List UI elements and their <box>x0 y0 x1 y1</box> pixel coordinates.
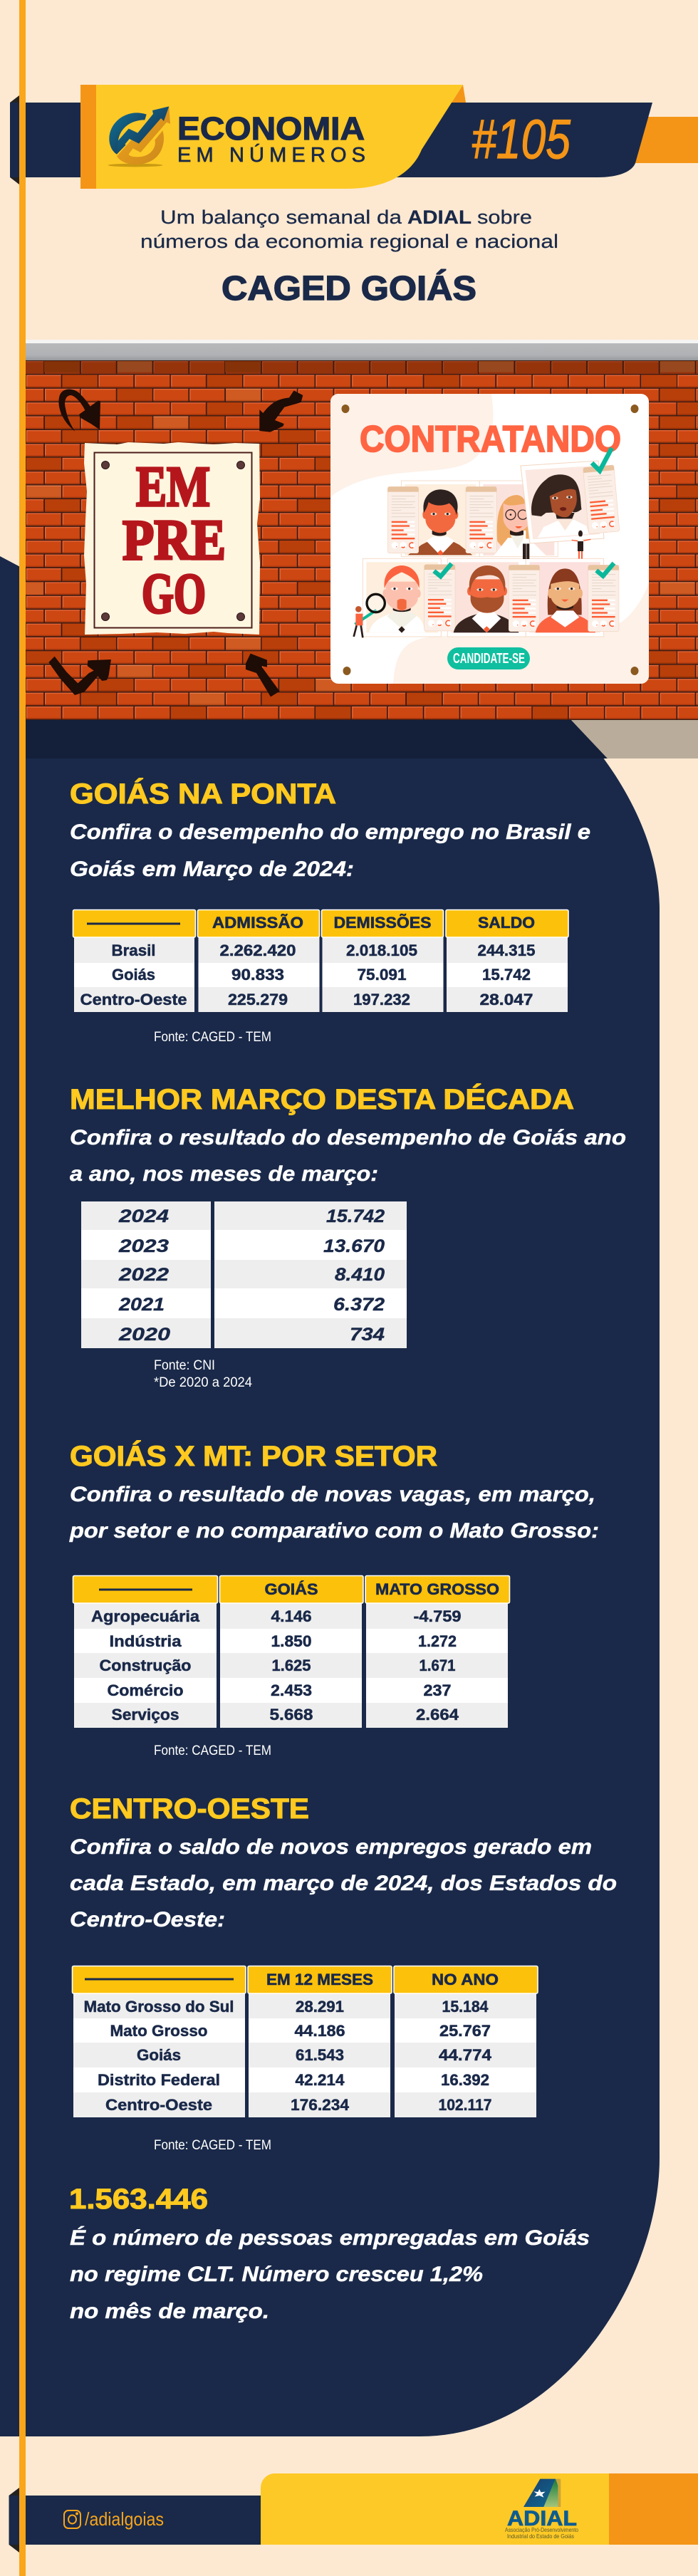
closing text: É o número de pessoas empregadas em Goiás <box>70 2226 590 2250</box>
subtitle: sobre <box>477 207 532 228</box>
table: brasil goiás centro-oeste: 2.018.105 <box>346 942 417 959</box>
table: brasil goiás centro-oeste: 225.279 <box>228 991 288 1008</box>
footer ribbon <box>9 2473 698 2552</box>
poster words <box>123 456 226 625</box>
table: sectors <box>73 1575 510 1728</box>
person 6 <box>536 568 595 632</box>
table: states: Mato Grosso <box>110 2022 208 2040</box>
source note: *De 2020 a 2024 <box>154 1375 252 1390</box>
table: sectors: 1.671 <box>419 1657 456 1674</box>
intro text <box>70 1835 617 1931</box>
table: sectors: Serviços <box>111 1706 179 1724</box>
table: brasil goiás centro-oeste: SALDO <box>478 914 535 932</box>
poster: contratando <box>330 394 649 684</box>
table: states: 15.184 <box>442 1998 489 2016</box>
table: march results by year: 734 <box>350 1325 385 1345</box>
icon: magnifier with figure <box>354 594 385 637</box>
heading: GOIÁS NA PONTA <box>70 778 336 810</box>
table: sectors: 1.850 <box>271 1632 312 1650</box>
person 4 <box>369 565 425 633</box>
subtitle: números da economia regional e nacional <box>140 231 558 252</box>
table: brasil goiás centro-oeste: 28.047 <box>480 991 533 1008</box>
teal check on top photo <box>592 448 612 471</box>
wall base shadow <box>26 720 698 758</box>
table: states: 176.234 <box>291 2096 350 2114</box>
table: states: 102.117 <box>439 2096 491 2114</box>
table: sectors: 2.664 <box>416 1706 459 1724</box>
section: goiás na ponta <box>70 778 590 1045</box>
table: sectors: 237 <box>423 1681 452 1699</box>
subtitle: Um balanço semanal da <box>160 207 402 228</box>
icon: brush arrow top left <box>58 389 100 432</box>
logo wordmark: EM NÚMEROS <box>177 143 365 167</box>
source note: Fonte: CAGED - TEM <box>154 2138 271 2153</box>
intro text <box>70 1126 626 1186</box>
closing text: no mês de março. <box>70 2300 269 2323</box>
poster words: PRE <box>123 509 226 572</box>
closing text <box>70 2226 590 2323</box>
section: goiás x mt <box>69 1440 599 1758</box>
table: sectors: Indústria <box>110 1632 182 1650</box>
table: sectors: GOIÁS <box>265 1580 318 1598</box>
intro text: Confira o resultado de novas vagas, em março, <box>70 1483 595 1506</box>
illustration: brick wall <box>26 340 698 720</box>
table: march results by year: 6.372 <box>333 1295 385 1315</box>
source note <box>154 1358 252 1390</box>
table: brasil goiás centro-oeste: 2.262.420 <box>219 942 296 959</box>
source note: Fonte: CAGED - TEM <box>154 1030 271 1045</box>
banner: header ribbon <box>10 85 698 189</box>
table: states <box>73 1966 538 2117</box>
edition number: #105 <box>472 108 571 170</box>
icon: economia logo <box>108 106 170 167</box>
table: states: Centro-Oeste <box>105 2096 212 2114</box>
table: march results by year: 15.742 <box>326 1206 385 1226</box>
table: sectors: Agropecuária <box>91 1607 200 1625</box>
nails <box>101 462 245 621</box>
intro text <box>69 1483 599 1543</box>
table: brasil goiás centro-oeste: ADMISSÃO <box>212 914 303 932</box>
table: march results by year: 2021 <box>118 1295 165 1315</box>
table: sectors: Comércio <box>107 1681 184 1699</box>
logo: adial: Associação Pró-Desenvolvimento <box>505 2526 578 2533</box>
table: states: Mato Grosso do Sul <box>84 1998 234 2016</box>
vertical orange bar <box>19 0 26 2576</box>
closing text: no regime CLT. Número cresceu 1,2% <box>70 2263 483 2286</box>
logo: adial <box>505 2479 578 2540</box>
nails <box>342 405 638 675</box>
table: brasil goiás centro-oeste: Goiás <box>112 966 155 984</box>
person figures small <box>523 531 590 559</box>
intro text: Centro-Oeste: <box>70 1908 225 1931</box>
table: sectors: Construção <box>100 1657 191 1674</box>
table: states: 61.543 <box>296 2046 344 2064</box>
table: states: 28.291 <box>296 1998 344 2016</box>
table: sectors: 2.453 <box>271 1681 312 1699</box>
intro text <box>70 820 590 881</box>
table: march results by year: 13.670 <box>323 1236 385 1256</box>
icon: brush arrow bottom right <box>246 654 280 697</box>
table: states: EM 12 MESES <box>266 1971 373 1988</box>
heading: CONTRATANDO <box>360 419 621 460</box>
section: total employed <box>69 2184 590 2323</box>
logo wordmark: ECONOMIA <box>177 110 365 147</box>
logo wordmark <box>177 110 365 167</box>
table: brasil goiás centro-oeste: 90.833 <box>231 966 284 984</box>
table: sectors: 1.272 <box>418 1632 457 1650</box>
table: sectors: 5.668 <box>269 1706 313 1724</box>
intro text: Confira o saldo de novos empregos gerado em <box>70 1835 592 1859</box>
table: states: 42.214 <box>295 2071 345 2089</box>
title: CAGED GOIÁS <box>222 269 476 308</box>
intro text: Goiás em Março de 2024: <box>70 857 354 881</box>
table: states: Distrito Federal <box>98 2071 220 2089</box>
subtitle <box>140 207 558 252</box>
table: sectors: 4.146 <box>271 1607 312 1625</box>
person 3 front photo <box>521 461 604 543</box>
table: march results by year <box>81 1201 407 1348</box>
poster: emprego <box>84 442 260 635</box>
table: march results by year: 2022 <box>118 1265 169 1285</box>
big number: 1.563.446 <box>69 2184 208 2215</box>
icon: brush arrow top right <box>259 390 303 432</box>
logo: adial: ADIAL <box>507 2507 577 2530</box>
table: brasil goiás centro-oeste: Centro-Oeste <box>80 991 187 1008</box>
source note: Fonte: CAGED - TEM <box>154 1743 271 1758</box>
table: brasil goiás centro-oeste: 197.232 <box>353 991 410 1008</box>
poster words: GO <box>142 563 206 625</box>
illustration: candidates <box>354 461 620 637</box>
table: sectors: -4.759 <box>413 1607 462 1625</box>
heading: CENTRO-OESTE <box>70 1793 309 1825</box>
icon: brush arrow bottom left <box>48 657 111 695</box>
button: candidate-se <box>447 647 530 669</box>
table: march results by year: 2024 <box>118 1206 169 1226</box>
table: brasil goiás centro-oeste: 15.742 <box>482 966 531 984</box>
table: states: NO ANO <box>432 1971 499 1988</box>
logo: adial: Industrial do Estado de Goiás <box>507 2533 574 2540</box>
table: brasil goiás centro-oeste: 75.091 <box>358 966 406 984</box>
table: brasil goiás centro-oeste: Brasil <box>111 942 155 959</box>
panel: navy content background <box>0 556 660 2436</box>
table: march results by year: 2020 <box>118 1325 170 1345</box>
table: march results by year: 2023 <box>118 1236 169 1256</box>
person 1 <box>408 489 472 556</box>
intro text: Confira o desempenho do emprego no Brasil e <box>70 820 590 844</box>
table: brasil goiás centro-oeste: DEMISSÕES <box>333 914 432 932</box>
heading: GOIÁS X MT: POR SETOR <box>70 1440 437 1472</box>
section: melhor março desta década <box>70 1083 626 1390</box>
icon: instagram <box>64 2510 80 2528</box>
table: states: 16.392 <box>441 2071 489 2089</box>
table: states: 44.774 <box>439 2046 492 2064</box>
person 5 <box>454 565 519 633</box>
table: states: 44.186 <box>295 2022 345 2040</box>
table: sectors: 1.625 <box>272 1657 311 1674</box>
table: brasil goiás centro-oeste: 244.315 <box>477 942 536 959</box>
poster words: EM <box>136 456 210 518</box>
table: states: Goiás <box>137 2046 181 2064</box>
intro text: cada Estado, em março de 2024, dos Estados do <box>70 1872 617 1895</box>
intro text: Confira o resultado do desempenho de Goiás ano <box>70 1126 626 1149</box>
table: brasil goiás centro-oeste <box>73 910 568 1012</box>
button: candidate-se: CANDIDATE-SE <box>453 651 525 667</box>
table: sectors: MATO GROSSO <box>375 1580 499 1598</box>
person 2 <box>494 495 546 556</box>
social handle: /adialgoias <box>85 2508 164 2530</box>
intro text: por setor e no comparativo com o Mato Grosso: <box>69 1519 599 1543</box>
table: states: 25.767 <box>439 2022 491 2040</box>
intro text: a ano, nos meses de março: <box>70 1162 378 1186</box>
table: march results by year: 8.410 <box>335 1265 385 1285</box>
section: centro-oeste <box>70 1793 617 2153</box>
icon: check marks <box>434 563 614 576</box>
subtitle: ADIAL <box>407 207 472 228</box>
source note: Fonte: CNI <box>154 1358 215 1373</box>
heading: MELHOR MARÇO DESTA DÉCADA <box>70 1083 574 1115</box>
